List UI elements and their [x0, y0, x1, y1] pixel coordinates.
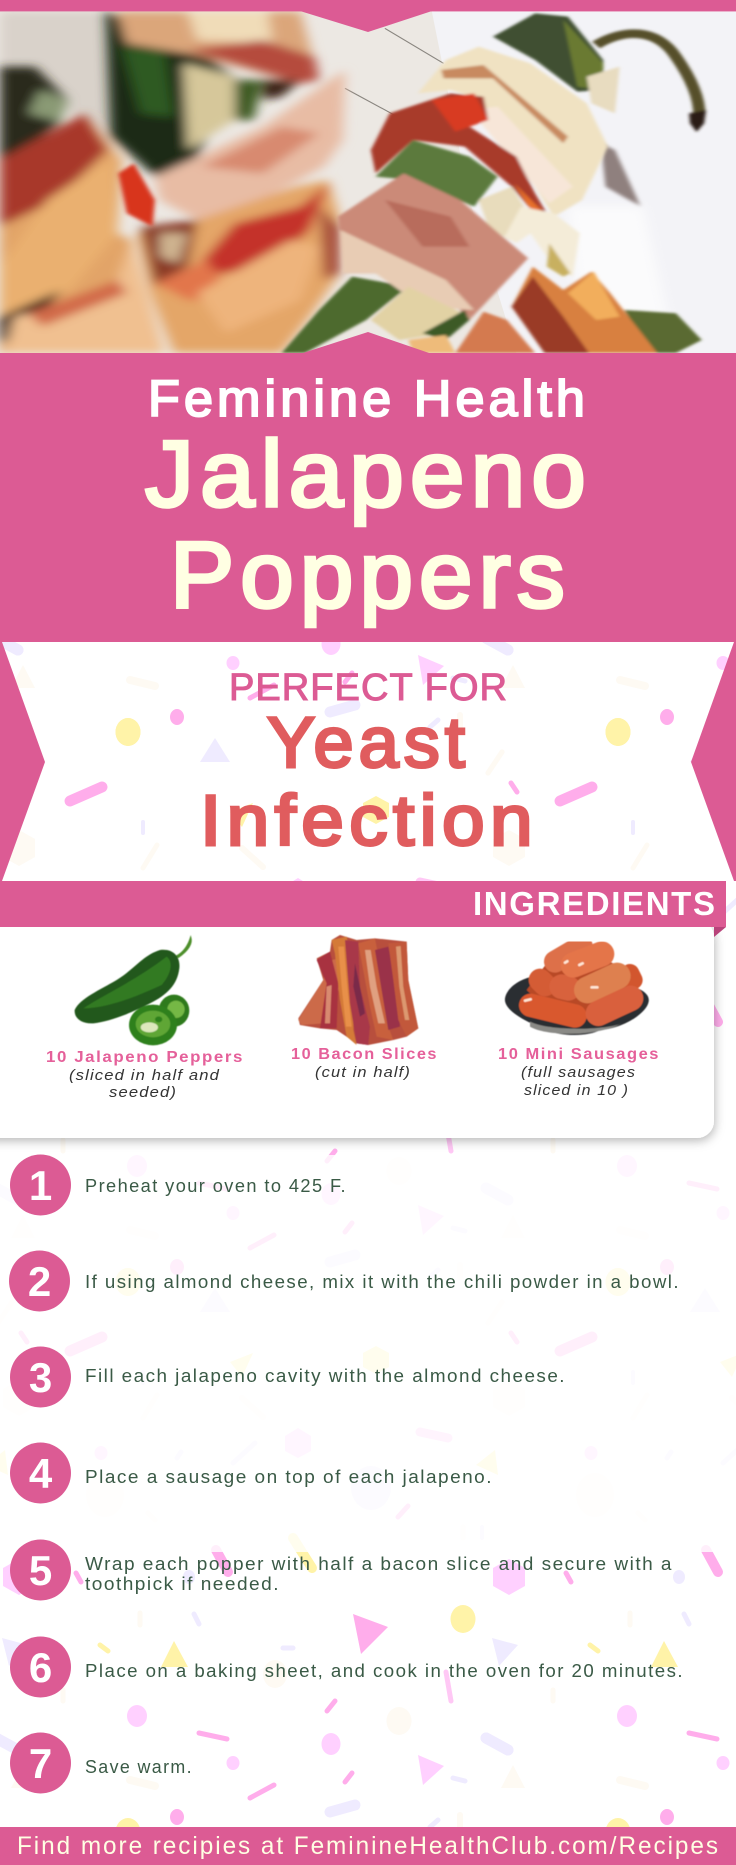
- step 1: 1: [29, 1162, 52, 1209]
- ingredient: sausage label: (full sausages: [521, 1065, 636, 1081]
- title line: Jalapeno: Jalapeno: [145, 421, 592, 526]
- icon: jalapeno pepper: [75, 937, 191, 1045]
- step 4: 4: [29, 1450, 53, 1497]
- ingredients header band: [0, 881, 726, 937]
- infection: Infection: [200, 782, 538, 861]
- step 1: Preheat your oven to 425 F.: [85, 1176, 347, 1196]
- ingredient: bacon label: [291, 1046, 438, 1081]
- step 6: 6: [29, 1644, 52, 1691]
- step 4: Place a sausage on top of each jalapeno.: [85, 1467, 493, 1487]
- step 5: [10, 1540, 673, 1600]
- icon: bacon slices: [298, 935, 418, 1045]
- ingredient: sausage label: sliced in 10 ): [524, 1083, 629, 1099]
- step 5: toothpick if needed.: [85, 1574, 280, 1594]
- ingredient: jalapeno label: (sliced in half and: [69, 1068, 220, 1084]
- step 1: [10, 1154, 347, 1216]
- ingredient: bacon label: 10 Bacon Slices: [291, 1046, 438, 1063]
- step 3: Fill each jalapeno cavity with the almond cheese.: [85, 1366, 566, 1386]
- step 2: [9, 1250, 680, 1312]
- icon: mini sausages in bowl: [505, 946, 649, 1035]
- bottom notch: [300, 332, 432, 354]
- step 7: [10, 1732, 193, 1794]
- title line: Poppers: Poppers: [170, 522, 571, 627]
- yeast: Yeast: [267, 704, 470, 783]
- step 4: [10, 1442, 493, 1504]
- ribbon left wedge: [0, 642, 45, 881]
- step 6: Place on a baking sheet, and cook in the oven for 20 minutes.: [85, 1661, 684, 1681]
- step 2: If using almond cheese, mix it with the chili powder in a bowl.: [85, 1272, 680, 1292]
- top notch: [300, 11, 432, 32]
- step 2: 2: [28, 1258, 51, 1305]
- footer text: Find more recipies at FeminineHealthClub.com/Recipes: [17, 1832, 720, 1860]
- ribbon heading: [200, 667, 538, 861]
- top pink bar: [0, 0, 736, 12]
- ingredient: jalapeno label: 10 Jalapeno Peppers: [46, 1049, 244, 1066]
- title panel: [0, 353, 736, 642]
- step 3: 3: [29, 1354, 52, 1401]
- ingredient: jalapeno label: [46, 1049, 244, 1101]
- step 3: [10, 1346, 566, 1408]
- ingredient: sausage label: [498, 1046, 660, 1099]
- title line: Feminine Health: Feminine Health: [148, 370, 589, 427]
- step 6: [10, 1636, 684, 1698]
- step 5: Wrap each popper with half a bacon slice and secure with a: [85, 1554, 673, 1574]
- perfect for: PERFECT FOR: [229, 667, 508, 709]
- step 5: 5: [29, 1547, 52, 1594]
- ribbon right wedge: [691, 642, 736, 881]
- step 7: Save warm.: [85, 1757, 193, 1777]
- ingredient: bacon label: (cut in half): [315, 1065, 411, 1081]
- ingredients card: [0, 920, 714, 1138]
- ingredient: jalapeno label: seeded): [109, 1085, 177, 1101]
- photo: bacon wrapped jalapeno poppers: [0, 11, 736, 353]
- ingredients heading: INGREDIENTS: [473, 885, 715, 922]
- step 7: 7: [29, 1740, 52, 1787]
- footer: [0, 1827, 736, 1865]
- ingredient: sausage label: 10 Mini Sausages: [498, 1046, 660, 1063]
